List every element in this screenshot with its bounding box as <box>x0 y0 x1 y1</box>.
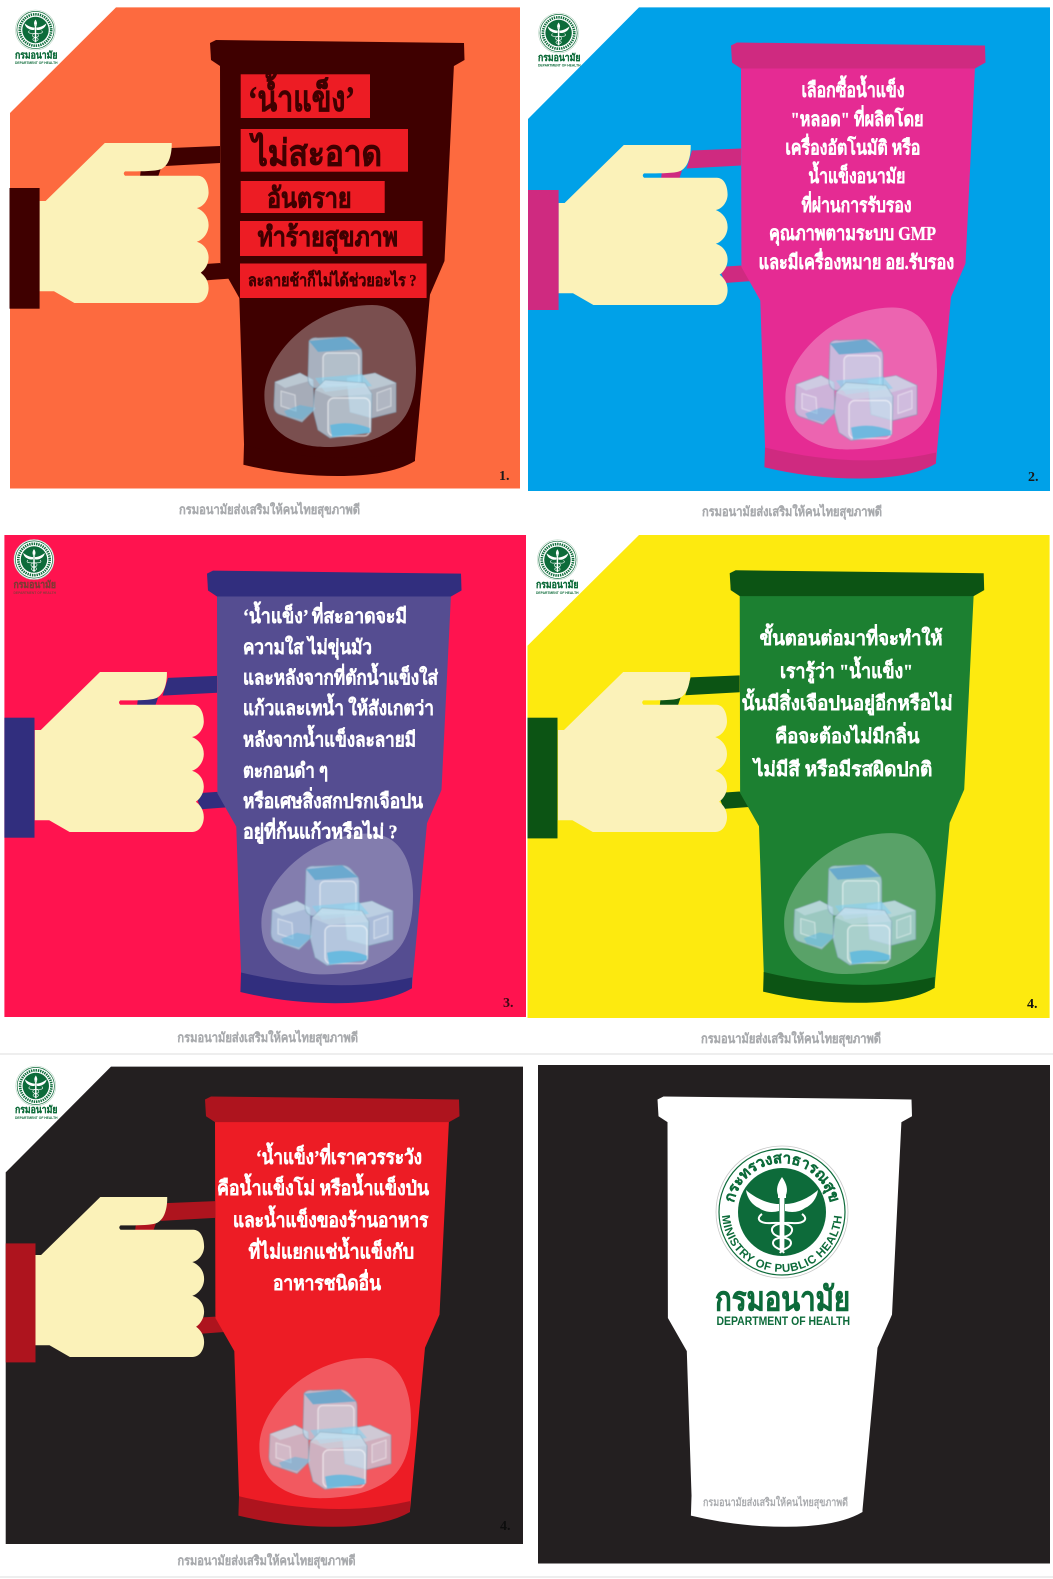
hand holding tumbler <box>528 145 728 310</box>
logo: Department of Health <box>15 1066 58 1120</box>
advice text: และมีเครื่องหมาย อย.รับรอง <box>759 247 954 274</box>
logo: Department of Health: DEPARTMENT OF HEALTH <box>14 591 56 595</box>
advice text: เลือกซื้อน้ำแข็ง <box>802 75 904 102</box>
advice text <box>742 623 953 781</box>
advice text: และน้ำแข็งของร้านอาหาร <box>233 1205 429 1232</box>
advice text <box>217 1142 429 1295</box>
page number 1: 1. <box>499 469 510 484</box>
advice text: เรารู้ว่า "น้ำแข็ง" <box>780 656 913 685</box>
advice text: ที่ผ่านการรับรอง <box>802 190 912 217</box>
advice text: ความใส ไม่ขุ่นมัว <box>243 635 372 660</box>
caption 1: กรมอนามัยส่งเสริมให้คนไทยสุขภาพดี <box>179 501 360 518</box>
advice text: ‘น้ำแข็ง’ที่เราควรระวัง <box>256 1142 422 1169</box>
tumbler with ice <box>661 42 986 478</box>
advice text: อยู่ที่ก้นแก้วหรือไม่ ? <box>243 817 398 846</box>
page number 4 (dark): 4. <box>500 1519 510 1534</box>
logo: Department of Health <box>14 540 56 595</box>
advice text: ที่ไม่แยกแช่น้ำแข็งกับ <box>248 1237 414 1264</box>
advice text: คือน้ำแข็งโม่ หรือน้ำแข็งป่น <box>217 1173 429 1200</box>
headline boxes: ‘น้ำแข็ง’ <box>248 72 355 119</box>
advice text: หรือเศษสิ่งสกปรกเจือปน <box>243 786 423 813</box>
logo: Department of Health: DEPARTMENT OF HEALTH <box>536 591 579 595</box>
page number 4: 4. <box>1027 997 1038 1012</box>
advice text: เครื่องอัตโนมัติ หรือ <box>785 132 920 160</box>
advice text: อาหารชนิดอื่น <box>273 1268 381 1295</box>
logo: Department of Health: DEPARTMENT OF HEALTH <box>538 64 581 68</box>
headline boxes: ทำร้ายสุขภาพ <box>258 222 398 254</box>
hand holding tumbler <box>6 1197 204 1362</box>
logo wordmark: กรมอนามัย <box>715 1280 850 1318</box>
logo: Department of Health: กรมอนามัย <box>14 579 56 591</box>
advice text <box>243 601 439 846</box>
panel 1: orange, dirty ice warning <box>10 7 520 489</box>
tumbler with ice <box>140 40 464 476</box>
advice text: ตะกอนดำ ๆ <box>243 760 328 782</box>
advice text: คือจะต้องไม่มีกลิ่น <box>775 721 920 748</box>
logo: Department of Health <box>538 13 581 68</box>
panel 2: blue, choosing tube ice <box>528 7 1050 491</box>
ministry logo seal: MINISTRY OF PUBLIC HEALTH <box>722 1215 842 1272</box>
advice text <box>759 75 954 274</box>
logo: Department of Health: DEPARTMENT OF HEALTH <box>15 61 58 65</box>
white tumbler <box>658 1096 912 1527</box>
hand holding tumbler <box>528 672 727 838</box>
hand holding tumbler <box>10 143 209 309</box>
logo wordmark: DEPARTMENT OF HEALTH <box>716 1316 850 1328</box>
divider lines <box>0 1054 1053 1578</box>
tumbler with ice <box>135 1096 460 1527</box>
caption 2: กรมอนามัยส่งเสริมให้คนไทยสุขภาพดี <box>702 503 882 520</box>
logo: Department of Health <box>15 10 58 65</box>
caption 3: กรมอนามัยส่งเสริมให้คนไทยสุขภาพดี <box>177 1029 358 1046</box>
logo: Department of Health: กรมอนามัย <box>15 1104 58 1116</box>
logo wordmark <box>715 1280 850 1328</box>
logo: Department of Health: กรมอนามัย <box>538 52 581 64</box>
logo: Department of Health: กรมอนามัย <box>15 50 58 62</box>
tumbler with ice <box>137 571 462 1003</box>
headline boxes: ละลายช้าก็ไม่ได้ช่วยอะไร ? <box>248 268 416 290</box>
advice text: แก้วและเทน้ำ ให้สังเกตว่า <box>243 693 434 720</box>
panel 3: crimson, clean ice is clear <box>4 535 526 1017</box>
tumbler with ice <box>660 570 984 1003</box>
advice text: น้ำแข็งอนามัย <box>808 161 905 188</box>
caption 5: กรมอนามัยส่งเสริมให้คนไทยสุขภาพดี <box>178 1552 356 1569</box>
advice text: คุณภาพตามระบบ GMP <box>769 223 936 246</box>
headline boxes: อันตราย <box>267 184 352 215</box>
panel 4: yellow, impurities check <box>528 535 1050 1018</box>
ministry logo seal: กระทรวงสาธารณสุข <box>726 1154 839 1202</box>
advice text: และหลังจากที่ตักน้ำแข็งใส่ <box>243 663 439 690</box>
advice text: ไม่มีสี หรือมีรสผิดปกติ <box>752 757 932 781</box>
headline boxes <box>240 72 427 298</box>
logo: Department of Health: DEPARTMENT OF HEALTH <box>15 1116 58 1120</box>
advice text: นั้นมีสิ่งเจือปนอยู่อีกหรือไม่ <box>742 688 953 717</box>
logo: Department of Health <box>536 540 579 595</box>
advice text: หลังจากน้ำแข็งละลายมี <box>243 724 416 751</box>
panel 6: black with white tumbler and ministry logo <box>538 1065 1050 1564</box>
ministry logo seal <box>716 1146 848 1278</box>
hand holding tumbler <box>4 672 204 838</box>
page number 3: 3. <box>503 996 514 1011</box>
headline boxes: ไม่สะอาด <box>248 132 382 174</box>
advice text: ‘น้ำแข็ง’ ที่สะอาดจะมี <box>243 601 407 628</box>
logo: Department of Health: กรมอนามัย <box>536 579 579 591</box>
panel 5: black, ice to be wary of <box>6 1066 523 1544</box>
page number 2: 2. <box>1028 470 1038 485</box>
advice text: "หลอด" ที่ผลิตโดย <box>791 104 924 131</box>
slogan on tumbler: กรมอนามัยส่งเสริมให้คนไทยสุขภาพดี <box>703 1495 848 1510</box>
caption 4: กรมอนามัยส่งเสริมให้คนไทยสุขภาพดี <box>701 1030 881 1047</box>
advice text: ขั้นตอนต่อมาที่จะทำให้ <box>760 623 943 650</box>
